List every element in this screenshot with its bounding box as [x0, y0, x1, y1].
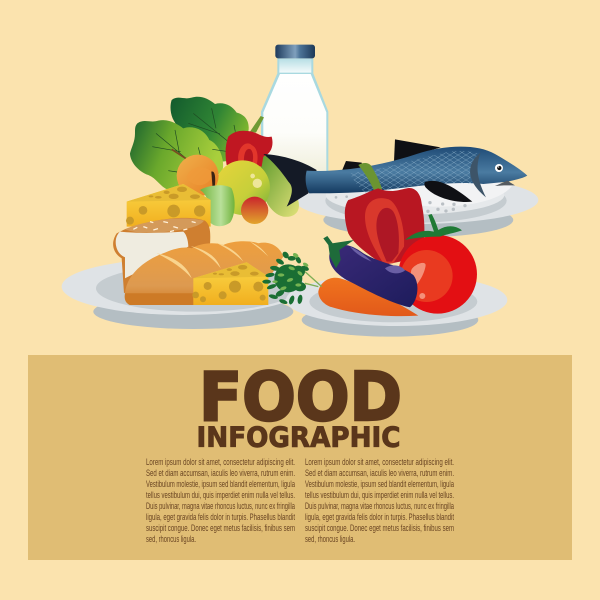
panel: text band	[28, 355, 572, 560]
apricot	[177, 155, 219, 197]
text block: left column: suscipit congue. Donec eget metus facilisis, finibus sem	[146, 523, 295, 534]
text block: left column: Lorem ipsum dolor sit amet, consectetur adipiscing elit.	[146, 457, 295, 468]
green apple	[200, 185, 235, 226]
text block: left column: ligula, eget gravida felis dolor in turpis. Phasellus blandit	[146, 512, 295, 523]
small red pepper	[250, 116, 264, 133]
back lettuce leaf	[171, 97, 250, 163]
fish plate	[295, 176, 538, 237]
text block: right column: Lorem ipsum dolor sit amet, consectetur adipiscing elit.	[305, 457, 454, 468]
text block: right column: ligula, eget gravida felis dolor in turpis. Phasellus blandit	[305, 512, 454, 523]
bread and cheese on left plate	[113, 218, 283, 305]
pear	[215, 160, 270, 215]
fish body	[306, 147, 527, 193]
front cheese wedge	[193, 262, 268, 305]
title: FOOD: FOOD	[199, 358, 402, 436]
subtitle: INFOGRAPHIC: INFOGRAPHIC	[196, 420, 400, 454]
text block: left column	[146, 457, 295, 545]
right plate	[286, 274, 507, 337]
text block: right column: sed, rhoncus ligula.	[305, 534, 355, 545]
belly dots	[335, 195, 467, 213]
baguette	[125, 241, 283, 305]
carrot	[318, 278, 418, 316]
fish gill	[470, 153, 486, 197]
text block: right column: suscipit congue. Donec eget metus facilisis, finibus sem	[305, 523, 454, 534]
fish eye	[495, 164, 503, 172]
side leaf behind fish	[261, 156, 299, 217]
top cheese wedge	[127, 184, 211, 227]
text block: left column: Duis pulvinar, magna vitae rhoncus luctus, nunc ex fringilla	[146, 501, 295, 512]
text block: left column: tellus vestibulum dui, quis imperdiet enim nulla vel tellus.	[146, 490, 295, 501]
text block: right column: tellus vestibulum dui, quis imperdiet enim nulla vel tellus.	[305, 490, 454, 501]
fish	[263, 139, 527, 213]
fish pectoral fin	[424, 181, 472, 202]
text block: right column: Sed et diam accumsan, iaculis leo viverra, rutrum enim.	[305, 468, 454, 479]
vegetables on right plate	[318, 163, 477, 316]
front lettuce leaf	[130, 120, 223, 190]
bread loaf with seeds	[113, 218, 210, 293]
milk bottle	[261, 45, 328, 172]
lettuce and fruit group	[126, 97, 299, 227]
text block: right column	[305, 457, 454, 545]
parsley	[262, 250, 322, 305]
small red apple	[241, 197, 268, 224]
text block: left column: Sed et diam accumsan, iaculis leo viverra, rutrum enim.	[146, 468, 295, 479]
big red pepper	[345, 163, 424, 265]
left plate	[62, 258, 305, 329]
text block: right column: Vestibulum molestie, ipsum sed blandit elementum, ligula	[305, 479, 454, 490]
illustration: food plates	[62, 45, 538, 337]
eggplant	[323, 236, 417, 307]
text block: right column: Duis pulvinar, magna vitae rhoncus luctus, nunc ex fringilla	[305, 501, 454, 512]
tomato	[398, 214, 477, 314]
text block: left column: sed, rhoncus ligula.	[146, 534, 196, 545]
fish fins and tail	[263, 154, 317, 207]
fish mouth	[495, 181, 515, 186]
fish belly	[390, 181, 513, 207]
text block: left column: Vestibulum molestie, ipsum sed blandit elementum, ligula	[146, 479, 295, 490]
